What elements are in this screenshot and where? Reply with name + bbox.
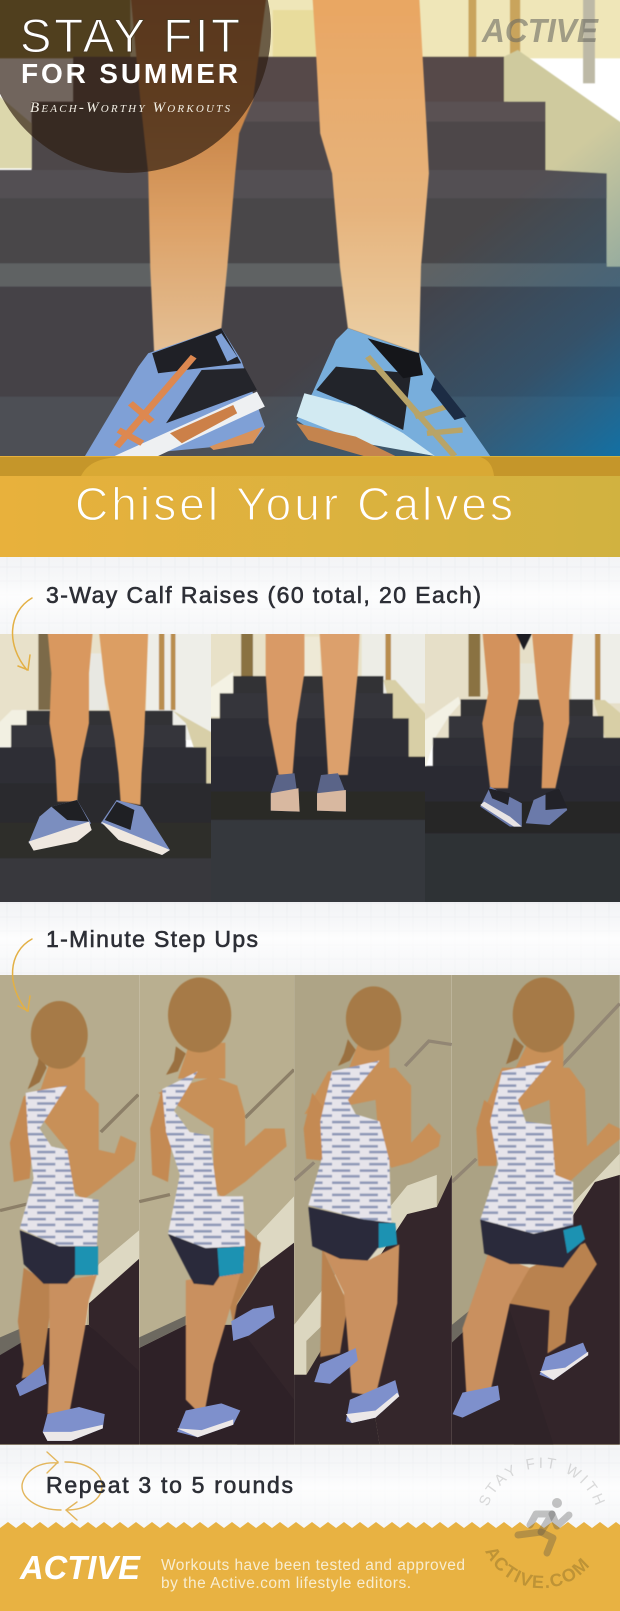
title: STAY FIT: STAY FIT bbox=[20, 9, 240, 62]
right running shoe bbox=[296, 328, 490, 456]
shoes: knee forward bbox=[453, 1343, 588, 1418]
paper strip: step ups heading bbox=[0, 902, 620, 975]
stamp: stay fit with active.com: ACTIVE.COM bbox=[485, 1549, 590, 1588]
hero photo: legs and running shoes on stairs bbox=[0, 0, 620, 477]
section banner: Chisel Your Calves bbox=[0, 456, 620, 557]
shoes: knee raised bbox=[177, 1305, 275, 1437]
photo: step up, knee forward bbox=[452, 975, 620, 1446]
right calf bbox=[312, 0, 429, 353]
shoes, first position bbox=[28, 800, 170, 855]
shoes, second position bbox=[271, 773, 346, 812]
footer note bbox=[161, 1557, 465, 1592]
person: knee forward bbox=[463, 977, 620, 1396]
icon: repeat arrows bbox=[22, 1452, 102, 1520]
shoes, third position bbox=[480, 787, 567, 827]
blue colour wash bbox=[256, 136, 620, 456]
title badge circle bbox=[0, 0, 271, 173]
paper strip: repeat rounds bbox=[0, 1445, 620, 1530]
footer logo: ACTIVE: ACTIVE bbox=[19, 1549, 141, 1586]
legs, second position bbox=[266, 630, 360, 775]
photo: calf raise, toes in bbox=[425, 634, 620, 902]
footer note: Workouts have been tested and approved bbox=[161, 1557, 465, 1574]
heading: Repeat 3 to 5 rounds: Repeat 3 to 5 rounds bbox=[46, 1472, 293, 1498]
person: stepping forward bbox=[304, 986, 441, 1396]
stamp: stay fit with active.com: STAY FIT WITH bbox=[480, 1458, 605, 1506]
title: FOR SUMMER: FOR SUMMER bbox=[21, 58, 238, 89]
footer note: by the Active.com lifestyle editors. bbox=[161, 1575, 411, 1592]
heading: 3-Way Calf Raises: 3-Way Calf Raises (60 total, 20 Each) bbox=[46, 582, 481, 608]
left calf bbox=[130, 0, 267, 353]
paper strip: 3-way calf raises heading bbox=[0, 557, 620, 634]
watermark: ACTIVE logo on hero: ACTIVE bbox=[481, 12, 599, 49]
curved arrow into first photo row bbox=[13, 598, 32, 670]
photo: step up, knee raised bbox=[139, 975, 294, 1446]
photo: calf raise, feet parallel bbox=[211, 634, 425, 902]
subtitle: Beach-Worthy Workouts: Beach-Worthy Workouts bbox=[30, 100, 230, 116]
shoes: stepping forward bbox=[314, 1348, 399, 1423]
curved arrow into second photo row bbox=[13, 939, 32, 1011]
left running shoe bbox=[85, 328, 265, 456]
legs, third position bbox=[482, 630, 573, 788]
photo: step up, standing bbox=[0, 975, 139, 1446]
legs, first position bbox=[47, 630, 148, 805]
person: standing pose bbox=[10, 1001, 136, 1414]
heading: 1-Minute Step Ups: 1-Minute Step Ups bbox=[46, 926, 258, 952]
icon: runner bbox=[518, 1498, 569, 1553]
footer band bbox=[0, 1522, 620, 1611]
photo: calf raise, feet out bbox=[0, 634, 211, 902]
person: knee raised bbox=[150, 977, 287, 1418]
photo: step up, stepping forward bbox=[294, 975, 452, 1446]
stamp: stay fit with active.com bbox=[480, 1458, 605, 1588]
banner title: Chisel Your Calves bbox=[75, 478, 513, 530]
shoes: standing pose bbox=[16, 1364, 105, 1441]
